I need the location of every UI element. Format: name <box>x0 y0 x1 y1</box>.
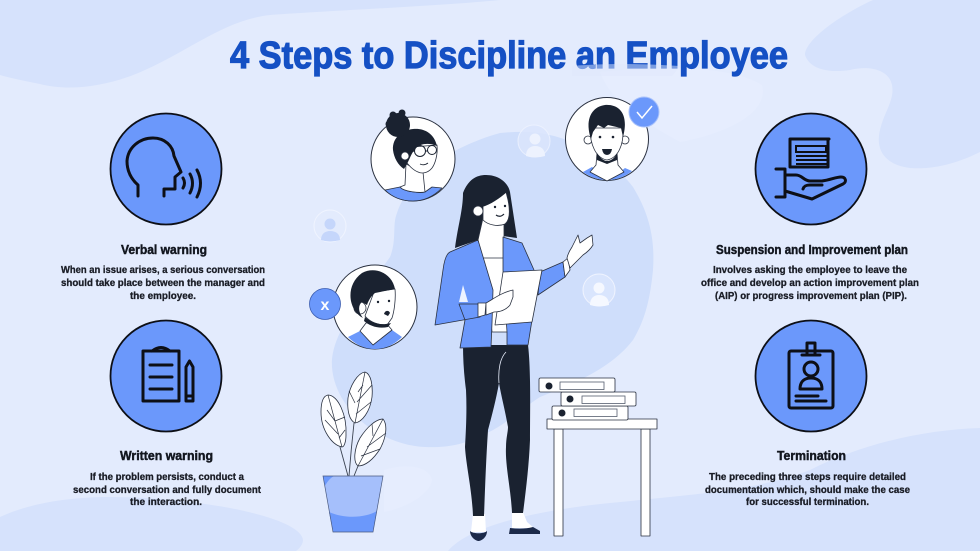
description <box>61 265 265 302</box>
binder 3 <box>552 406 628 420</box>
right cuff <box>563 258 570 277</box>
right sleeve <box>538 262 565 295</box>
title: 4 Steps to Discipline an Employee <box>230 35 788 77</box>
description <box>73 472 261 508</box>
plant in pot <box>321 372 386 532</box>
binder 1 <box>539 378 615 392</box>
description: office and develop an action improvement plan <box>701 278 919 289</box>
woman presenting <box>435 175 593 541</box>
step 4: termination <box>705 320 910 508</box>
central blob <box>332 132 653 447</box>
icon: hand holding document <box>756 114 866 224</box>
description: The preceding three steps require detailed <box>709 472 906 483</box>
icon: clipboard and pencil <box>110 320 222 432</box>
leaf: right <box>355 419 386 466</box>
step 1: verbal warning <box>61 114 265 302</box>
jacket left <box>435 240 493 348</box>
icon: faded user top <box>518 125 550 158</box>
description: Involves asking the employee to leave the <box>713 265 907 276</box>
stems <box>340 423 358 476</box>
description: second conversation and fully document <box>73 485 261 496</box>
avatar: worried man with x badge <box>310 265 417 349</box>
description <box>701 265 919 302</box>
badge: check <box>629 97 659 127</box>
table <box>547 419 657 536</box>
open hand <box>567 235 593 268</box>
step 3: suspension and improvement plan <box>701 114 919 302</box>
description: If the problem persists, conduct a <box>90 472 244 483</box>
hair fringe <box>480 183 507 207</box>
left cuff <box>478 303 486 317</box>
holding hand <box>486 290 513 315</box>
jacket right <box>503 237 536 345</box>
leaf: left <box>321 395 346 447</box>
description: When an issue arises, a serious conversation <box>61 265 265 276</box>
heading: Suspension and Improvement plan <box>716 242 908 257</box>
avatar: woman with glasses <box>371 110 455 201</box>
step 2: written warning <box>73 320 261 508</box>
icon: speaking head <box>110 114 222 224</box>
description <box>705 472 910 508</box>
description: should take place between the manager and <box>61 278 265 289</box>
binder 2 <box>561 392 636 406</box>
description: the employee. <box>130 291 196 302</box>
hair back <box>455 175 517 248</box>
trousers <box>463 345 530 516</box>
icon: id badge <box>756 320 866 432</box>
pot <box>323 476 383 532</box>
heading: Termination <box>777 448 846 463</box>
avatar: happy man with check badge <box>566 97 659 181</box>
description: documentation which, should make the case <box>705 485 910 496</box>
neck and shirt <box>478 218 510 332</box>
icon: faded user right <box>583 274 615 306</box>
jacket gap <box>459 285 468 302</box>
table with binders <box>539 378 657 536</box>
socks <box>471 512 534 532</box>
heading: Written warning <box>120 448 213 463</box>
description: for successful termination. <box>746 497 869 508</box>
description: the interaction. <box>130 497 202 508</box>
shoes <box>470 527 540 541</box>
badge: x: x <box>321 297 330 314</box>
paper <box>495 270 542 325</box>
leaf: top <box>348 372 372 423</box>
icon: faded user left <box>314 210 346 242</box>
description: (AIP) or progress improvement plan (PIP). <box>715 291 907 302</box>
heading: Verbal warning <box>121 242 207 257</box>
face <box>483 192 509 225</box>
